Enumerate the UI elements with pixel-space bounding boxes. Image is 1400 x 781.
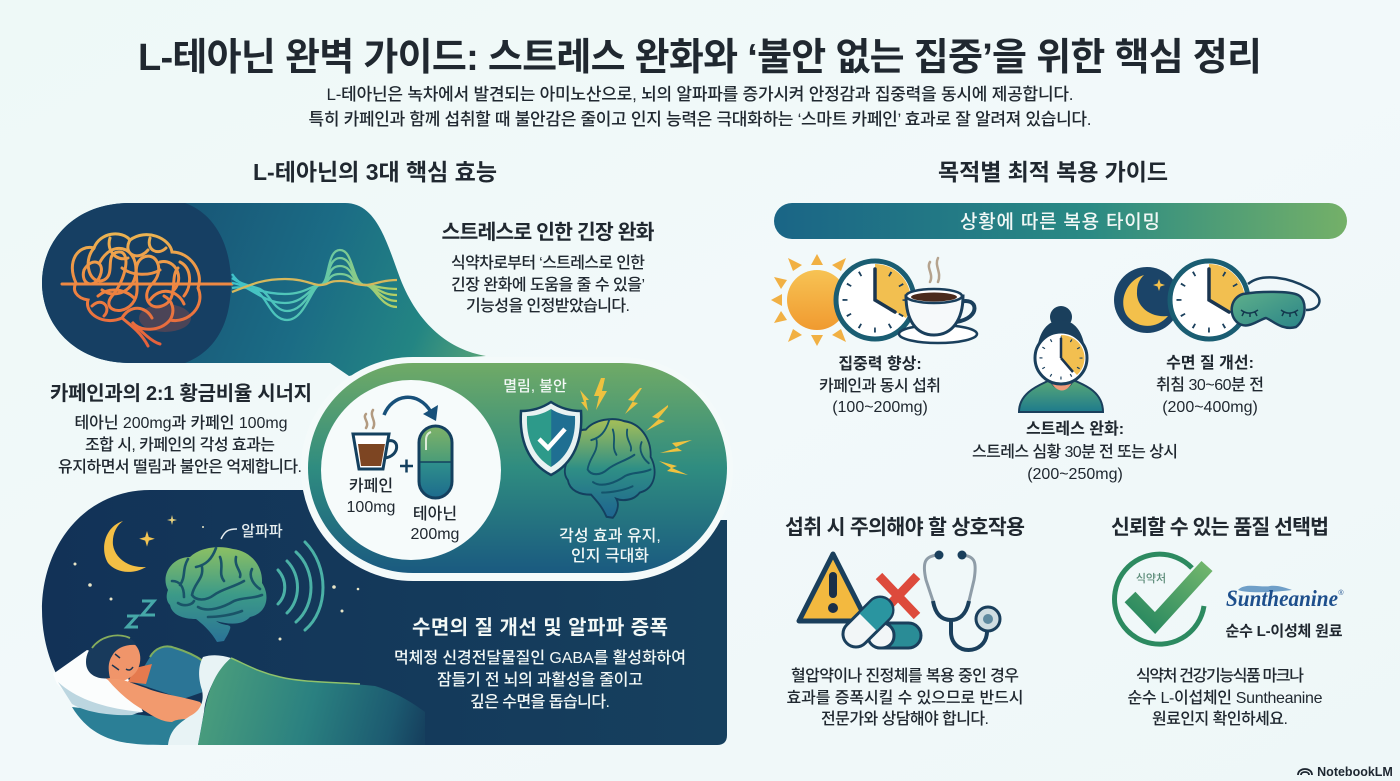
banner: dosing timing bbox=[774, 203, 1347, 239]
icon: certified check mark: 식약처 bbox=[1136, 572, 1166, 585]
icon: brain with shield bbox=[521, 402, 655, 518]
panel: quality selection bbox=[1111, 516, 1344, 728]
heading: 수면의 질 개선 및 알파파 증폭 bbox=[412, 616, 668, 639]
intro text bbox=[308, 85, 1092, 129]
title: L-테아닌 완벽 가이드: 스트레스 완화와 ‘불안 없는 집중’을 위한 핵심 정리 bbox=[138, 37, 1262, 79]
icon: moon disc bbox=[1114, 267, 1180, 333]
heading: 신뢰할 수 있는 품질 선택법 bbox=[1111, 516, 1329, 539]
icon: sleep mask bbox=[1232, 277, 1319, 328]
text block: 긴장 완화에 도움을 줄 수 있을’ bbox=[451, 276, 645, 294]
text block: 식약차로부터 ‘스트레스로 인한 bbox=[451, 254, 645, 272]
text block: 테아닌 200mg과 카페인 100mg bbox=[74, 414, 288, 432]
theanine label: 테아닌 bbox=[413, 505, 457, 523]
raw material label: 순수 L-이성체 원료 bbox=[1226, 623, 1343, 640]
label: 취침 30~60분 전 bbox=[1156, 376, 1264, 394]
text block bbox=[1128, 667, 1323, 728]
logo: Suntheanine: Suntheanine bbox=[1226, 586, 1338, 611]
icon: sun bbox=[771, 254, 847, 346]
text block: 깊은 수면을 돕습니다. bbox=[470, 693, 610, 711]
icon group: stress timing bbox=[972, 306, 1178, 483]
label: 스트레스 심황 30분 전 또는 상시 bbox=[972, 443, 1178, 461]
icon: crescent moon bbox=[104, 521, 146, 572]
arm bbox=[108, 679, 203, 722]
green pill bbox=[308, 363, 727, 573]
panel: caffeine synergy text bbox=[50, 382, 312, 476]
text block bbox=[451, 254, 645, 315]
icon: person with clock face bbox=[1019, 306, 1103, 412]
text block bbox=[58, 414, 302, 476]
icon: lightning bolts bbox=[580, 378, 692, 475]
text block: 기능성을 인정받았습니다. bbox=[466, 297, 630, 315]
caffeine label: 100mg bbox=[347, 499, 395, 516]
blanket bbox=[198, 658, 425, 745]
icon: coffee cup bbox=[353, 434, 397, 469]
label: 스트레스 완화: bbox=[1026, 420, 1124, 438]
logo: NotebookLM: NotebookLM bbox=[1317, 765, 1393, 779]
label: (200~400mg) bbox=[1162, 399, 1258, 416]
icon: stethoscope bbox=[924, 550, 1000, 650]
theanine label: 200mg bbox=[411, 526, 459, 543]
hair bbox=[86, 635, 136, 678]
text block: 전문가와 상담해야 합니다. bbox=[821, 710, 989, 728]
stars bbox=[74, 515, 359, 640]
intro text: L-테아닌은 녹차에서 발견되는 아미노산으로, 뇌의 알파파를 증가시켜 안정감과 집중력을 동시에 제공합니다. bbox=[326, 85, 1074, 104]
caffeine label bbox=[347, 477, 395, 516]
icon: coffee cup bbox=[899, 289, 977, 343]
arrow bbox=[384, 397, 438, 421]
icon: clock bbox=[836, 261, 914, 339]
chart: wave lines bbox=[232, 250, 397, 320]
navy backdrop bbox=[42, 490, 727, 745]
icon: sleeping person bbox=[53, 635, 425, 745]
icon: pills bbox=[838, 576, 921, 652]
heading: left column: L-테아닌의 3대 핵심 효능 bbox=[253, 159, 497, 185]
heading: 섭취 시 주의해야 할 상호작용 bbox=[785, 516, 1025, 539]
white circle bbox=[321, 380, 501, 560]
pillow bbox=[53, 650, 143, 714]
white sheet bbox=[168, 655, 231, 745]
label: 수면 질 개선: bbox=[1166, 354, 1254, 372]
icon group: sleep timing bbox=[1114, 261, 1319, 416]
icon: alpha wave arcs bbox=[278, 542, 323, 630]
jitter label: 멸림, 불안 bbox=[503, 378, 567, 395]
text block: 혈압약이나 진정체를 복용 중인 경우 bbox=[791, 667, 1019, 685]
text block: 잠들기 전 뇌의 과활성을 줄이고 bbox=[437, 671, 643, 689]
icon: steam bbox=[929, 258, 939, 282]
icon: alpha label bbox=[221, 523, 283, 540]
label: 카페인과 동시 섭취 bbox=[819, 377, 941, 395]
icon: zzz bbox=[127, 601, 155, 627]
icon: warning triangle bbox=[799, 554, 867, 621]
shirt bbox=[133, 646, 203, 699]
icon: alpha label: 알파파 bbox=[241, 523, 283, 540]
icon: steam bbox=[365, 410, 374, 428]
label: 집중력 향상: bbox=[838, 355, 922, 373]
label bbox=[972, 420, 1178, 483]
theanine label bbox=[411, 505, 459, 543]
panel: sleep and alpha waves bbox=[42, 490, 727, 745]
icon: capsule bbox=[419, 426, 452, 498]
text block: 유지하면서 떨림과 불안은 억제합니다. bbox=[58, 458, 302, 476]
heading: 카페인과의 2:1 황금비율 시너지 bbox=[50, 382, 312, 405]
text block: 식약처 건강기능식품 마크나 bbox=[1136, 667, 1304, 685]
white ring bbox=[301, 357, 733, 581]
face bbox=[98, 642, 140, 682]
heading: 스트레스로 인한 긴장 완화 bbox=[442, 221, 655, 244]
outcome label bbox=[559, 527, 661, 565]
neck bbox=[128, 664, 152, 684]
text block: 먹체정 신경전달물질인 GABA를 활성화하여 bbox=[394, 649, 686, 667]
text block: 원료인지 확인하세요. bbox=[1152, 710, 1288, 728]
label: (100~200mg) bbox=[832, 399, 928, 416]
intro text: 특히 카페인과 함께 섭취할 때 불안감은 줄이고 인지 능력은 극대화하는 ‘스마트 카페인’ 효과로 잘 알려져 있습니다. bbox=[308, 110, 1092, 129]
label: (200~250mg) bbox=[1027, 466, 1123, 483]
text block: 조합 시, 카페인의 각성 효과는 bbox=[85, 436, 275, 454]
icon: clock bbox=[1170, 261, 1248, 339]
text block bbox=[786, 667, 1024, 728]
icon: plus bbox=[400, 460, 413, 472]
icon group: focus timing bbox=[771, 254, 977, 416]
label bbox=[819, 355, 941, 416]
text block bbox=[394, 649, 686, 711]
panel: caffeine + theanine pill bbox=[301, 357, 733, 581]
outcome label: 인지 극대화 bbox=[571, 547, 649, 565]
icon: green brain bbox=[165, 547, 266, 642]
heading: right column: 목적별 최적 복용 가이드 bbox=[938, 159, 1168, 185]
logo: Suntheanine: ® bbox=[1338, 589, 1344, 597]
mattress bbox=[72, 707, 215, 745]
banner: dosing timing: 상황에 따른 복용 타이밍 bbox=[960, 211, 1160, 233]
teal speech-bubble shape bbox=[42, 203, 486, 376]
caffeine label: 카페인 bbox=[349, 477, 393, 495]
panel: interactions bbox=[785, 516, 1025, 728]
icon: line-art orange brain bbox=[62, 234, 232, 346]
glow bbox=[139, 304, 191, 332]
panel: stress relief bbox=[42, 203, 655, 376]
dark circle backdrop bbox=[42, 203, 231, 363]
icon: certified check mark bbox=[1115, 554, 1207, 644]
outcome label: 각성 효과 유지, bbox=[559, 527, 661, 545]
label bbox=[1156, 354, 1264, 416]
text block: 순수 L-이섭체인 Suntheanine bbox=[1128, 689, 1323, 707]
text block: 효과를 증폭시킬 수 있으므로 반드시 bbox=[786, 689, 1024, 707]
